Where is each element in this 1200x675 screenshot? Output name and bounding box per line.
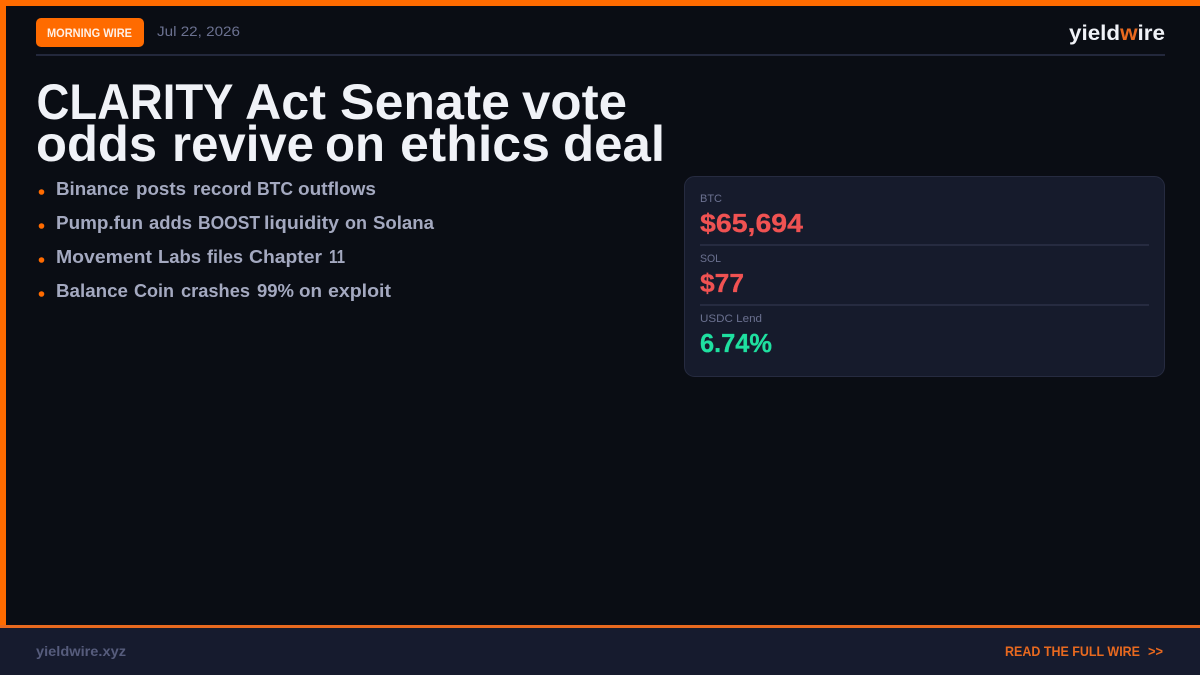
call to action: READ THE FULL WIRE [1005, 643, 1140, 659]
title: CLARITY [36, 74, 234, 130]
bullet list [39, 179, 435, 301]
bullet: Pump.fun: BOOST [198, 213, 260, 233]
title: vote [522, 74, 627, 130]
call to action: >> [1148, 643, 1163, 659]
metric: USDC Lend: 6.74% [700, 328, 772, 358]
bullet: Pump.fun: Solana [373, 213, 435, 233]
logo: yieldwire: yieldwire [1069, 22, 1165, 45]
bullet: Balance Coin: crashes [181, 281, 250, 301]
metric: USDC Lend: USDC Lend [700, 313, 762, 325]
metric: BTC [700, 193, 804, 238]
bullet: Pump.fun: liquidity [264, 213, 339, 233]
bullet: Binance: Binance [56, 179, 129, 199]
bullet: Movement Labs: Labs [158, 247, 201, 267]
bullet: Pump.fun: on [345, 213, 367, 233]
bullet: Pump.fun: adds [149, 213, 192, 233]
bullet: Movement Labs: 11 [329, 247, 345, 267]
bullet: Balance Coin: Coin [134, 281, 174, 301]
bullet: Binance: posts [136, 179, 186, 199]
header [36, 18, 1165, 47]
bullet: Pump.fun [39, 213, 435, 233]
left accent border [0, 0, 6, 628]
bullet: Balance Coin: on [299, 281, 322, 301]
title: odds [36, 116, 157, 172]
bullet: Pump.fun: Pump.fun [56, 213, 143, 233]
bullet: Movement Labs [39, 247, 345, 267]
footer url: yieldwire.xyz [36, 643, 126, 659]
bullet: Movement Labs: files [207, 247, 243, 267]
metric: SOL: SOL [700, 253, 721, 265]
title: deal [563, 116, 665, 172]
top accent border [0, 0, 1200, 6]
title: Senate [340, 74, 510, 130]
metric: BTC: $65,694 [700, 208, 804, 238]
title: revive [172, 116, 314, 172]
metric: SOL: $77 [700, 268, 744, 298]
bullet: Binance: outflows [298, 179, 376, 199]
panel: market prices [684, 176, 1164, 376]
bullet: Balance Coin: Balance [56, 281, 128, 301]
title: on [325, 116, 385, 172]
bullet: Movement Labs: Movement [56, 247, 152, 267]
bullet: Balance Coin: exploit [328, 281, 391, 301]
bullet: Binance [39, 179, 376, 199]
title [36, 74, 665, 172]
bullet: Binance: record [193, 179, 252, 199]
footer bar [0, 625, 1200, 675]
title: ethics [400, 116, 550, 172]
metric: USDC Lend [700, 313, 772, 358]
badge: morning wire [36, 18, 144, 47]
title: Act [245, 74, 326, 130]
metric: SOL [700, 253, 744, 298]
bullet: Movement Labs: Chapter [249, 247, 322, 267]
date: Jul 22, 2026 [157, 23, 240, 39]
metric: BTC: BTC [700, 193, 722, 205]
bullet: Binance: BTC [257, 179, 293, 199]
badge: morning wire: MORNING WIRE [47, 26, 132, 40]
bullet: Balance Coin: 99% [257, 281, 294, 301]
bullet: Balance Coin [39, 281, 391, 301]
